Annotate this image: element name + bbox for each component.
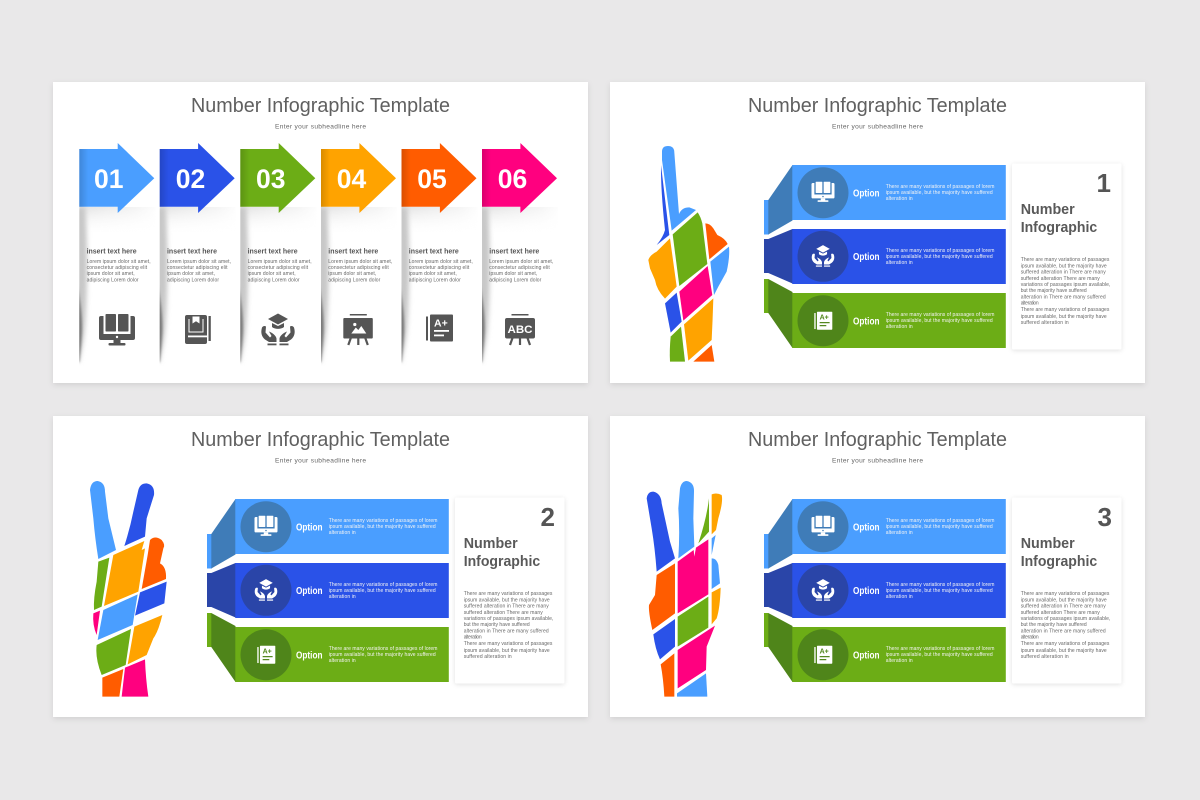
column 01: ipsum dolor sit amet, [87, 271, 135, 277]
option 3: Option [853, 650, 880, 662]
column 04: Lorem ipsum dolor sit amet, [328, 259, 392, 265]
card: number 1: but the majority have suffered [1021, 288, 1087, 294]
column 04 [315, 143, 397, 362]
option 2: Option [853, 586, 880, 597]
icon: A plus grade book [257, 646, 275, 664]
option 1: ipsum available, but the majority have suffered [886, 524, 993, 530]
hand: one finger [648, 146, 729, 362]
column 01: consectetur adipiscing elit [87, 265, 148, 271]
column 04: adipiscing Lorem dolor [328, 277, 381, 283]
card: number 3: 3 [1098, 502, 1112, 532]
card: number 3: ipsum available, but the majority have [1021, 648, 1107, 654]
option 3: Option [853, 316, 880, 328]
card: number 2: suffered alteration in There are many [464, 604, 549, 610]
card: number 2: suffered alteration in [464, 654, 512, 660]
column 06: insert text here [489, 248, 539, 255]
column 03: ipsum dolor sit amet, [248, 271, 296, 277]
panel: number two [53, 416, 588, 717]
column 02: consectetur adipiscing elit [167, 265, 228, 271]
option 3 [764, 279, 1006, 348]
card: number 1 [1012, 164, 1122, 350]
option 1: There are many variations of passages of lorem [886, 518, 994, 524]
column 05 [396, 143, 478, 362]
column 03: Lorem ipsum dolor sit amet, [248, 259, 312, 265]
icon: book on monitor [99, 314, 135, 346]
card: number 3: variations of passages ipsum available, [1021, 616, 1110, 622]
hand: two fingers [90, 481, 167, 697]
option 3: alteration in [329, 658, 356, 664]
icon: easel with picture [343, 314, 373, 345]
option 3: Option [296, 650, 322, 662]
column 03: consectetur adipiscing elit [248, 265, 309, 271]
column 05: consectetur adipiscing elit [409, 265, 470, 271]
column 06 [476, 143, 558, 362]
column 03: 03 [256, 164, 286, 194]
option 1: Option [296, 522, 322, 534]
card: number 2: but the majority have suffered [464, 622, 530, 628]
card: number 1: There are many variations of passages [1021, 307, 1110, 313]
card: number 2: ipsum available, but the majority have [464, 648, 550, 654]
card: number 2: There are many variations of passages [464, 591, 553, 597]
card: number 1: variations of passages ipsum available, [1021, 282, 1110, 288]
icon: easel with ABC: ABC [508, 324, 533, 336]
option 3: alteration in [886, 324, 913, 330]
card: number 1: Number [1021, 201, 1075, 218]
option 3: ipsum available, but the majority have suffered [329, 652, 436, 658]
column 01: adipiscing Lorem dolor [87, 277, 139, 283]
option 2: ipsum available, but the majority have suffered [886, 588, 993, 594]
hand: three fingers [647, 481, 722, 697]
icon: book on monitor [812, 182, 834, 202]
option 1: ipsum available, but the majority have suffered [886, 190, 993, 196]
card: number 3: but the majority have suffered [1021, 622, 1087, 628]
card: number 1: suffered alteration in [1021, 320, 1069, 326]
card: number 3: There are many variations of passages [1021, 591, 1110, 597]
card: number 2: There are many variations of passages [464, 641, 553, 647]
option 1: alteration in [886, 196, 913, 202]
column 03: insert text here [248, 248, 298, 255]
icon: graduation cap in hands [812, 245, 834, 267]
card: number 1: alteration in There are many suffered [1021, 294, 1106, 300]
option 2: Option [853, 252, 880, 263]
option 3: alteration in [886, 658, 913, 664]
subtitle: Enter your subheadline here [832, 124, 923, 130]
card: number 2: ipsum available, but the majority have [464, 597, 550, 603]
option 3: There are many variations of passages of lorem [329, 646, 437, 652]
column 06: Lorem ipsum dolor sit amet, [489, 259, 553, 265]
column 02: 02 [176, 164, 205, 194]
card: number 1: alteration [1021, 300, 1039, 306]
column 06: consectetur adipiscing elit [489, 265, 550, 271]
icon: A plus grade book [426, 314, 453, 342]
option 2: There are many variations of passages of lorem [886, 248, 994, 254]
column 06: adipiscing Lorem dolor [489, 277, 542, 283]
options stack [764, 499, 1006, 682]
option 2: alteration in [886, 260, 913, 266]
card: number 1: 1 [1097, 168, 1111, 198]
option 2: There are many variations of passages of lorem [329, 582, 437, 588]
title: Number Infographic Template [191, 94, 450, 117]
column 04: consectetur adipiscing elit [328, 265, 389, 271]
icon: book on monitor [254, 516, 278, 536]
option 3 [207, 613, 449, 682]
option 1 [207, 499, 449, 568]
icon: A plus grade book [814, 646, 832, 664]
card: number 3: suffered alteration in There are many [1021, 604, 1106, 610]
option 1: alteration in [329, 530, 356, 536]
column 05: adipiscing Lorem dolor [409, 277, 461, 283]
column 04: 04 [337, 164, 366, 194]
option 1 [764, 165, 1006, 234]
card: number 2: suffered alteration There are many [464, 610, 543, 616]
card: number 3: ipsum available, but the majority have [1021, 597, 1107, 603]
card: number 2 [455, 498, 564, 684]
card: number 1: ipsum available, but the majority have [1021, 263, 1107, 269]
option 3: ipsum available, but the majority have suffered [886, 318, 993, 324]
column 01: 01 [94, 164, 124, 194]
option 1: There are many variations of passages of lorem [886, 184, 994, 190]
card: number 3: suffered alteration There are many [1021, 610, 1100, 616]
icon: graduation cap in hands [261, 314, 295, 345]
option 2 [207, 563, 449, 618]
card: number 2: alteration in There are many suffered [464, 628, 549, 634]
column 04: ipsum dolor sit amet, [328, 271, 376, 277]
column 05: 05 [417, 164, 447, 194]
option 1: There are many variations of passages of lorem [329, 518, 437, 524]
title: Number Infographic Template [748, 428, 1007, 451]
panel: number three [610, 416, 1145, 717]
card: number 2: alteration [464, 634, 482, 640]
option 2: ipsum available, but the majority have suffered [886, 254, 993, 260]
subtitle: Enter your subheadline here [275, 124, 366, 130]
column 03: adipiscing Lorem dolor [248, 277, 300, 283]
card: number 3: Number [1021, 535, 1075, 552]
card: number 2: 2 [541, 502, 555, 532]
option 1: alteration in [886, 530, 913, 536]
subtitle: Enter your subheadline here [832, 458, 923, 464]
card: number 1: suffered alteration There are many [1021, 276, 1100, 282]
column 05: insert text here [409, 248, 459, 255]
option 2: alteration in [886, 594, 913, 600]
icon: graduation cap in hands [255, 579, 277, 601]
column 02: ipsum dolor sit amet, [167, 271, 215, 277]
option 1 [764, 499, 1006, 568]
card: number 3: There are many variations of passages [1021, 641, 1110, 647]
option 2: There are many variations of passages of lorem [886, 582, 994, 588]
panel: number one [610, 82, 1145, 383]
column 01 [73, 143, 155, 362]
subtitle: Enter your subheadline here [275, 458, 366, 464]
card: number 1: suffered alteration in There are many [1021, 270, 1106, 276]
title: Number Infographic Template [748, 94, 1007, 117]
options stack [207, 499, 449, 682]
icon: book with bookmark [185, 315, 211, 344]
column 02: adipiscing Lorem dolor [167, 277, 219, 283]
panel: six numbered arrows [53, 82, 588, 383]
column 05: ipsum dolor sit amet, [409, 271, 457, 277]
card: number 1: ipsum available, but the majority have [1021, 314, 1107, 320]
card: number 1: There are many variations of passages [1021, 257, 1110, 263]
option 3: ipsum available, but the majority have suffered [886, 652, 993, 658]
option 1: ipsum available, but the majority have suffered [329, 524, 436, 530]
option 2: alteration in [329, 594, 356, 600]
card: number 2: variations of passages ipsum available, [464, 616, 553, 622]
card: number 3 [1012, 498, 1122, 684]
column 06: 06 [498, 164, 527, 194]
option 3: There are many variations of passages of lorem [886, 312, 994, 318]
option 1: Option [853, 188, 880, 200]
icon: A plus grade book [814, 312, 832, 330]
card: number 2: Infographic [464, 553, 540, 570]
column 05: Lorem ipsum dolor sit amet, [409, 259, 473, 265]
column 06: ipsum dolor sit amet, [489, 271, 537, 277]
card: number 3: suffered alteration in [1021, 654, 1069, 660]
option 2 [764, 563, 1006, 618]
option 3 [764, 613, 1006, 682]
option 1: Option [853, 522, 880, 534]
options stack [764, 165, 1006, 348]
card: number 3: alteration in There are many suffered [1021, 628, 1106, 634]
option 3: There are many variations of passages of lorem [886, 646, 994, 652]
option 2: Option [296, 586, 322, 597]
column 02: insert text here [167, 248, 217, 255]
column 02: Lorem ipsum dolor sit amet, [167, 259, 231, 265]
icon: graduation cap in hands [812, 579, 834, 601]
column 01: insert text here [87, 248, 137, 255]
icon: easel with ABC [505, 314, 535, 345]
column 01: Lorem ipsum dolor sit amet, [87, 259, 151, 265]
column 04: insert text here [328, 248, 378, 255]
icon: book on monitor [812, 516, 834, 536]
card: number 3: Infographic [1021, 553, 1097, 570]
card: number 3: alteration [1021, 634, 1039, 640]
title: Number Infographic Template [191, 428, 450, 451]
option 2 [764, 229, 1006, 284]
option 2: ipsum available, but the majority have suffered [329, 588, 436, 594]
column 03 [234, 143, 316, 362]
column 02 [154, 143, 236, 362]
card: number 2: Number [464, 535, 518, 552]
card: number 1: Infographic [1021, 219, 1097, 236]
